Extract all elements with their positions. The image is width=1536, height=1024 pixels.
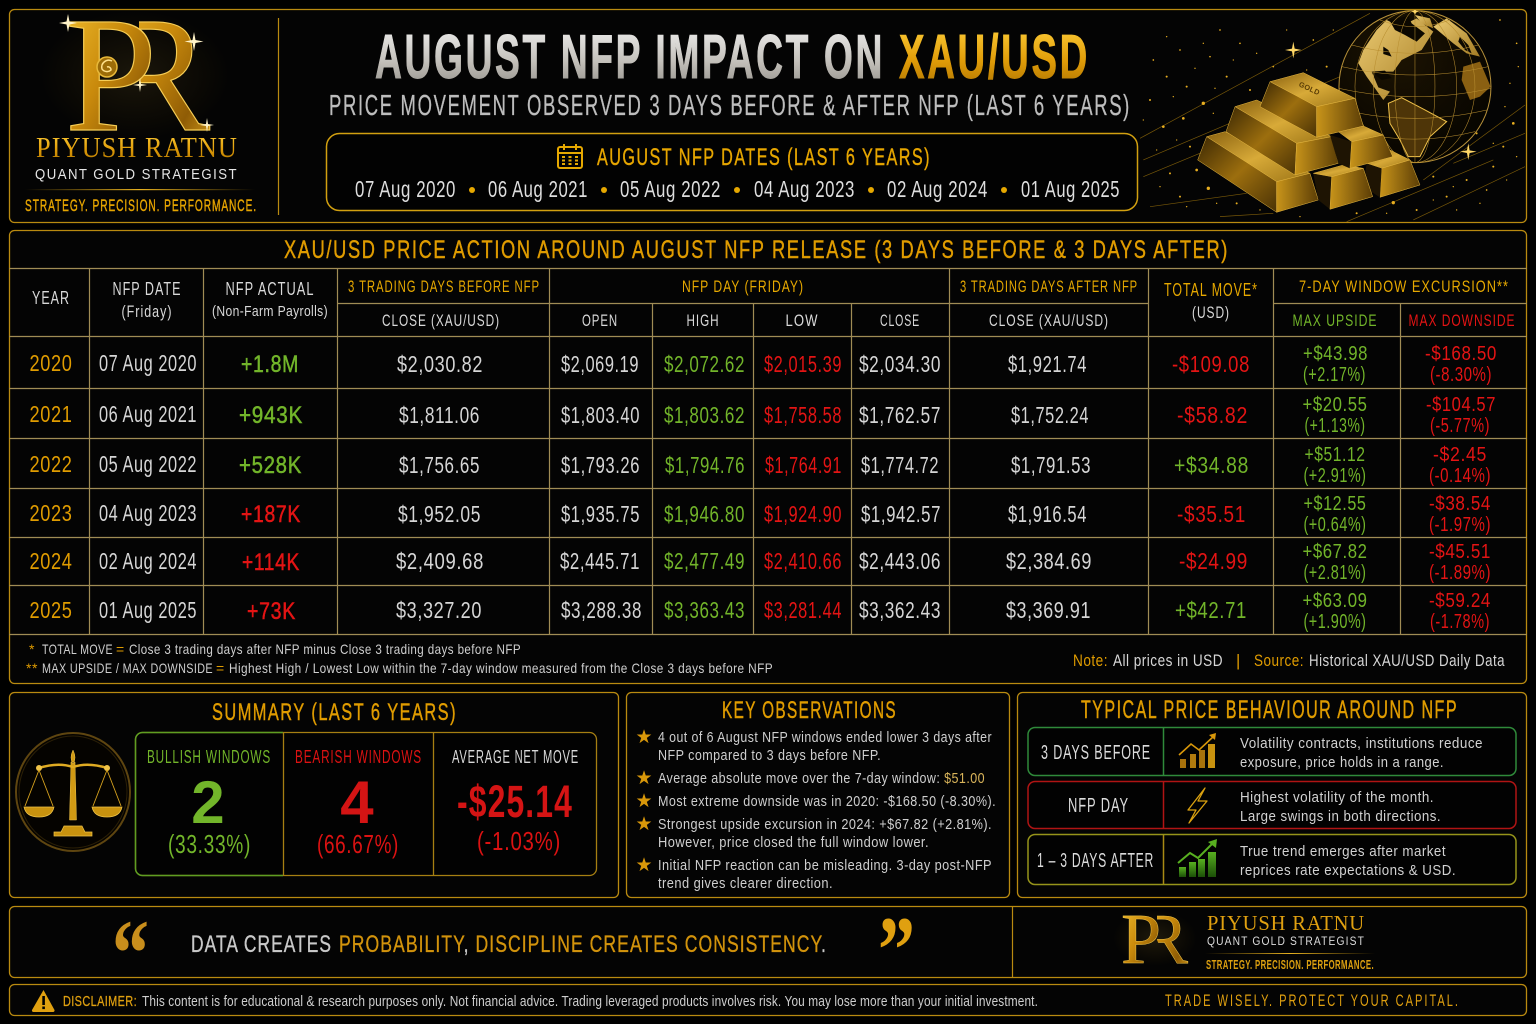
row 2023: -$38.54 bbox=[1429, 493, 1491, 515]
table header: (Non-Farm Payrolls) bbox=[212, 303, 328, 320]
logo monogram PR bbox=[59, 14, 214, 132]
panel: price action table bbox=[9, 230, 1527, 684]
row 2025: $3,281.44 bbox=[764, 597, 842, 623]
table header: YEAR bbox=[32, 288, 70, 308]
icon: balance scales bbox=[16, 733, 130, 851]
row 2025: $3,362.43 bbox=[859, 597, 941, 623]
row 2020: -$109.08 bbox=[1172, 351, 1250, 377]
footer brand: PIYUSH RATNU bbox=[1207, 911, 1365, 935]
row 2023: (-1.97%) bbox=[1429, 514, 1491, 536]
stat: bullish windows: BULLISH WINDOWS bbox=[147, 747, 271, 767]
dates list: 05 Aug 2022 bbox=[620, 176, 721, 202]
row 2023 bbox=[30, 493, 1491, 536]
main title: AUGUST NFP IMPACT ON bbox=[375, 23, 885, 92]
observation list: Most extreme downside was in 2020: -$168.50 (-8.30%). bbox=[658, 793, 996, 810]
observations heading: KEY OBSERVATIONS bbox=[722, 697, 897, 724]
footer brand: QUANT GOLD STRATEGIST bbox=[1207, 934, 1365, 948]
row: NFP day bbox=[1028, 782, 1516, 828]
stat: bullish windows bbox=[147, 747, 271, 859]
table header: NFP DAY (FRIDAY) bbox=[682, 277, 804, 296]
table header: CLOSE (XAU/USD) bbox=[382, 311, 500, 330]
dates list: 04 Aug 2023 bbox=[754, 176, 855, 202]
quote text: DATA CREATES bbox=[191, 931, 332, 958]
row 2020: +$43.98 bbox=[1303, 343, 1368, 365]
data note: Note: bbox=[1073, 652, 1108, 670]
row 2024: $2,445.71 bbox=[560, 548, 640, 574]
row 2024: (-1.89%) bbox=[1429, 562, 1491, 584]
row 2025: (+1.90%) bbox=[1304, 611, 1366, 633]
row 2025: -$59.24 bbox=[1429, 590, 1491, 612]
row 2021: +$20.55 bbox=[1302, 394, 1368, 416]
row 2024: +$67.82 bbox=[1302, 541, 1368, 563]
row 2022: $1,791.53 bbox=[1011, 452, 1091, 478]
panel: summary bbox=[10, 692, 618, 898]
row 2022: $1,774.72 bbox=[861, 452, 939, 478]
row 2021 bbox=[30, 394, 1496, 437]
observation list: ★ bbox=[635, 790, 653, 812]
table header: OPEN bbox=[582, 311, 618, 330]
row 2025: $3,327.20 bbox=[396, 597, 482, 623]
row 2022: $1,764.91 bbox=[765, 452, 842, 478]
table header: (Friday) bbox=[122, 302, 172, 321]
summary stat box bbox=[136, 732, 596, 876]
observation list: Strongest upside excursion in 2024: +$67.82 (+2.81%). bbox=[658, 816, 992, 833]
row 2020: -$168.50 bbox=[1425, 343, 1497, 365]
opening quote mark: “ bbox=[112, 900, 149, 1006]
row 2021: 06 Aug 2021 bbox=[99, 401, 197, 427]
row 2025: +73K bbox=[247, 598, 296, 625]
table header: CLOSE bbox=[880, 311, 920, 330]
row: NFP day: Highest volatility of the month. bbox=[1240, 789, 1434, 806]
row 2023: +187K bbox=[241, 501, 301, 528]
row: 1 to 3 days after: 1 – 3 DAYS AFTER bbox=[1037, 850, 1154, 872]
table header: HIGH bbox=[686, 311, 720, 330]
row 2022 bbox=[30, 444, 1491, 487]
footer brand bbox=[1122, 916, 1374, 969]
main title: XAU/USD bbox=[899, 23, 1090, 92]
row: 3 days before: exposure, price holds in a range. bbox=[1240, 754, 1444, 771]
row 2024: $2,409.68 bbox=[396, 548, 484, 574]
row 2023: 2023 bbox=[30, 500, 72, 526]
gold bars bbox=[1198, 73, 1420, 212]
row: 3 days before bbox=[1028, 728, 1516, 776]
disclaimer text: DISCLAIMER: bbox=[63, 994, 137, 1010]
icon: gold rising bars bbox=[1179, 733, 1216, 768]
brand name: PIYUSH RATNU bbox=[36, 132, 238, 164]
row 2020: $2,015.39 bbox=[764, 351, 842, 377]
brand role: QUANT GOLD STRATEGIST bbox=[35, 166, 238, 183]
stat: average net move: AVERAGE NET MOVE bbox=[452, 747, 579, 767]
observation list: ★ bbox=[635, 767, 653, 789]
table header: LOW bbox=[786, 311, 818, 330]
row 2021: $1,752.24 bbox=[1011, 402, 1089, 428]
icon: green rising bars bbox=[1178, 839, 1217, 877]
data note: Source: bbox=[1254, 652, 1304, 670]
row 2022: (+2.91%) bbox=[1304, 465, 1366, 487]
row 2023: $1,946.80 bbox=[664, 501, 745, 527]
row 2024: $2,410.66 bbox=[764, 548, 842, 574]
row 2020 bbox=[30, 343, 1497, 386]
panel: quote and footer brand bbox=[8, 906, 1528, 978]
row: NFP day: Large swings in both directions. bbox=[1240, 808, 1441, 825]
row 2020: $2,072.62 bbox=[664, 351, 745, 377]
row 2025: (-1.78%) bbox=[1430, 611, 1490, 633]
row 2020: $2,069.19 bbox=[561, 351, 639, 377]
row 2023: $1,942.57 bbox=[861, 501, 941, 527]
data note: All prices in USD bbox=[1113, 652, 1223, 670]
stat: bearish windows: 4 bbox=[340, 769, 376, 836]
row 2021: $1,803.62 bbox=[664, 402, 745, 428]
row 2021: (-5.77%) bbox=[1430, 415, 1490, 437]
panel: typical price behaviour bbox=[1018, 692, 1526, 898]
row 2024: 02 Aug 2024 bbox=[99, 548, 197, 574]
row 2023: 04 Aug 2023 bbox=[99, 500, 197, 526]
illustration: gold bars and globe bbox=[1140, 8, 1525, 222]
row 2024: $2,443.06 bbox=[859, 548, 941, 574]
dates heading: AUGUST NFP DATES (LAST 6 YEARS) bbox=[597, 144, 931, 171]
observation list: Average absolute move over the 7-day window: $51.00 bbox=[658, 770, 985, 787]
table footnotes: Highest High / Lowest Low within the 7-day window measured from the Close 3 days before NFP bbox=[229, 660, 773, 676]
observation list: ★ bbox=[635, 813, 653, 835]
observation list: 4 out of 6 August NFP windows ended lower 3 days after bbox=[658, 729, 992, 746]
table header: CLOSE (XAU/USD) bbox=[989, 311, 1109, 330]
table footnotes: Close 3 trading days after NFP minus Close 3 trading days before NFP bbox=[129, 641, 521, 657]
table header: NFP ACTUAL bbox=[226, 279, 314, 299]
row 2025 bbox=[30, 590, 1491, 633]
row: 1 to 3 days after: reprices rate expectations & USD. bbox=[1240, 862, 1456, 879]
row 2025: $3,288.38 bbox=[561, 597, 642, 623]
table footnotes: * bbox=[29, 641, 35, 657]
stat: bearish windows: BEARISH WINDOWS bbox=[295, 747, 422, 767]
row 2020: (-8.30%) bbox=[1430, 364, 1492, 386]
row 2020: $2,034.30 bbox=[859, 351, 941, 377]
observation list: However, price closed the full window lower. bbox=[658, 834, 929, 851]
disclaimer text: This content is for educational & research purposes only. Not financial advice. Trading leveraged products involves risk. You may lose more than your initial investment. bbox=[142, 994, 1038, 1010]
row 2023: (+0.64%) bbox=[1304, 514, 1366, 536]
dates list bbox=[355, 176, 1120, 202]
stat: bearish windows: (66.67%) bbox=[317, 829, 399, 859]
table header: MAX UPSIDE bbox=[1292, 311, 1378, 330]
icon: calendar bbox=[558, 144, 582, 168]
observation list: ★ bbox=[635, 726, 653, 748]
brand tagline: STRATEGY. PRECISION. PERFORMANCE. bbox=[25, 196, 257, 215]
dates list: 01 Aug 2025 bbox=[1021, 176, 1120, 202]
row 2021: $1,811.06 bbox=[399, 402, 480, 428]
panel: key observations bbox=[626, 692, 1010, 898]
table footnotes: ** bbox=[26, 660, 38, 676]
row 2025: $3,369.91 bbox=[1006, 597, 1091, 623]
bar stamp: GOLD bbox=[1297, 80, 1321, 97]
stat: bearish windows bbox=[295, 747, 422, 859]
row 2023: -$35.51 bbox=[1177, 501, 1246, 527]
row 2024: (+2.81%) bbox=[1304, 562, 1366, 584]
logo glow bbox=[40, 10, 230, 140]
footer brand: STRATEGY. PRECISION. PERFORMANCE. bbox=[1206, 958, 1374, 972]
row 2022: +$34.88 bbox=[1174, 452, 1249, 478]
dates list: 06 Aug 2021 bbox=[488, 176, 588, 202]
row 2023: $1,924.90 bbox=[764, 501, 842, 527]
row: 1 to 3 days after bbox=[1028, 834, 1516, 884]
row 2024: $2,384.69 bbox=[1006, 548, 1092, 574]
row: 3 days before: 3 DAYS BEFORE bbox=[1041, 742, 1151, 764]
row 2022: $1,794.76 bbox=[665, 452, 745, 478]
observation list: NFP compared to 3 days before NFP. bbox=[658, 747, 881, 764]
row 2023: $1,916.54 bbox=[1008, 501, 1087, 527]
row 2025: +$63.09 bbox=[1302, 590, 1368, 612]
table footnotes bbox=[26, 641, 773, 676]
stat: average net move: (-1.03%) bbox=[477, 826, 561, 856]
row 2021: $1,758.58 bbox=[764, 402, 842, 428]
row 2022: (-0.14%) bbox=[1429, 465, 1491, 487]
small logo monogram: R bbox=[1142, 899, 1188, 979]
stat: average net move bbox=[452, 747, 579, 856]
globe bbox=[1339, 11, 1491, 163]
row 2020: $1,921.74 bbox=[1008, 351, 1087, 377]
summary heading: SUMMARY (LAST 6 YEARS) bbox=[212, 699, 457, 726]
row 2022: $1,756.65 bbox=[399, 452, 480, 478]
row 2024: 2024 bbox=[30, 548, 72, 574]
table header bbox=[32, 277, 1516, 330]
row 2024: -$45.51 bbox=[1429, 541, 1491, 563]
dates list: 07 Aug 2020 bbox=[355, 176, 456, 202]
row: 3 days before: Volatility contracts, institutions reduce bbox=[1240, 735, 1483, 752]
row 2021: $1,762.57 bbox=[859, 402, 941, 428]
observation list bbox=[635, 726, 996, 892]
row 2023: $1,952.05 bbox=[398, 501, 481, 527]
row 2021: -$58.82 bbox=[1177, 402, 1248, 428]
closing quote mark: ” bbox=[878, 897, 915, 1003]
row 2020: (+2.17%) bbox=[1303, 364, 1366, 386]
quote text bbox=[191, 931, 827, 958]
row 2025: 2025 bbox=[30, 597, 72, 623]
row 2022: $1,793.26 bbox=[561, 452, 640, 478]
brand logo block bbox=[25, 0, 257, 215]
small logo monogram bbox=[1122, 916, 1188, 964]
table header: (USD) bbox=[1192, 303, 1230, 322]
row 2023: $1,935.75 bbox=[561, 501, 640, 527]
row 2023: +$12.55 bbox=[1304, 493, 1366, 515]
table footnotes: TOTAL MOVE bbox=[42, 641, 113, 657]
quote text: PROBABILITY, DISCIPLINE CREATES CONSISTENCY. bbox=[339, 931, 827, 958]
row 2022: +528K bbox=[239, 452, 302, 479]
row 2021: $1,803.40 bbox=[561, 402, 640, 428]
table footnotes: MAX UPSIDE / MAX DOWNSIDE bbox=[42, 660, 213, 676]
small logo monogram: P bbox=[1121, 899, 1161, 979]
row 2020: 2020 bbox=[30, 350, 72, 376]
table header: TOTAL MOVE* bbox=[1164, 280, 1258, 300]
icon: warning triangle bbox=[32, 990, 55, 1012]
row 2020: +1.8M bbox=[241, 351, 299, 378]
stat: bullish windows: (33.33%) bbox=[168, 829, 251, 859]
row 2022: 05 Aug 2022 bbox=[99, 451, 197, 477]
data note: | bbox=[1236, 652, 1241, 670]
stat: average net move: -$25.14 bbox=[457, 776, 573, 827]
row 2021: 2021 bbox=[30, 401, 72, 427]
row 2025: +$42.71 bbox=[1175, 597, 1247, 623]
row 2022: 2022 bbox=[30, 451, 72, 477]
row 2021: (+1.13%) bbox=[1304, 415, 1366, 437]
observation list: ★ bbox=[635, 854, 653, 876]
row 2022: +$51.12 bbox=[1304, 444, 1366, 466]
row 2020: 07 Aug 2020 bbox=[99, 350, 197, 376]
stat: bullish windows: 2 bbox=[191, 769, 227, 836]
row: NFP day: NFP DAY bbox=[1068, 795, 1129, 817]
table footnotes: = bbox=[116, 641, 125, 657]
panel: NFP dates bbox=[326, 134, 1138, 210]
sparkles bbox=[1285, 8, 1477, 160]
row 2024: +114K bbox=[242, 549, 300, 576]
icon: lightning bolt bbox=[1188, 788, 1207, 823]
row 2022: -$2.45 bbox=[1433, 444, 1487, 466]
row 2024: $2,477.49 bbox=[664, 548, 745, 574]
data note bbox=[1073, 652, 1505, 670]
panel: disclaimer bar bbox=[10, 984, 1526, 1016]
table header: 3 TRADING DAYS BEFORE NFP bbox=[348, 277, 540, 296]
row 2025: $3,363.43 bbox=[664, 597, 745, 623]
row 2021: +943K bbox=[239, 402, 303, 429]
table footnotes: = bbox=[216, 660, 225, 676]
table header: 3 TRADING DAYS AFTER NFP bbox=[960, 277, 1138, 296]
row 2021: -$104.57 bbox=[1426, 394, 1496, 416]
table header: NFP DATE bbox=[112, 279, 182, 299]
row 2024: -$24.99 bbox=[1179, 548, 1248, 574]
row 2020: $2,030.82 bbox=[397, 351, 483, 377]
row 2025: 01 Aug 2025 bbox=[99, 597, 197, 623]
panel: header bbox=[10, 0, 1526, 222]
observation list: trend gives clearer direction. bbox=[658, 875, 833, 892]
row: 1 to 3 days after: True trend emerges after market bbox=[1240, 843, 1446, 860]
dates list: 02 Aug 2024 bbox=[887, 176, 988, 202]
observation list: Initial NFP reaction can be misleading. 3-day post-NFP bbox=[658, 857, 992, 874]
row 2024 bbox=[30, 541, 1491, 584]
